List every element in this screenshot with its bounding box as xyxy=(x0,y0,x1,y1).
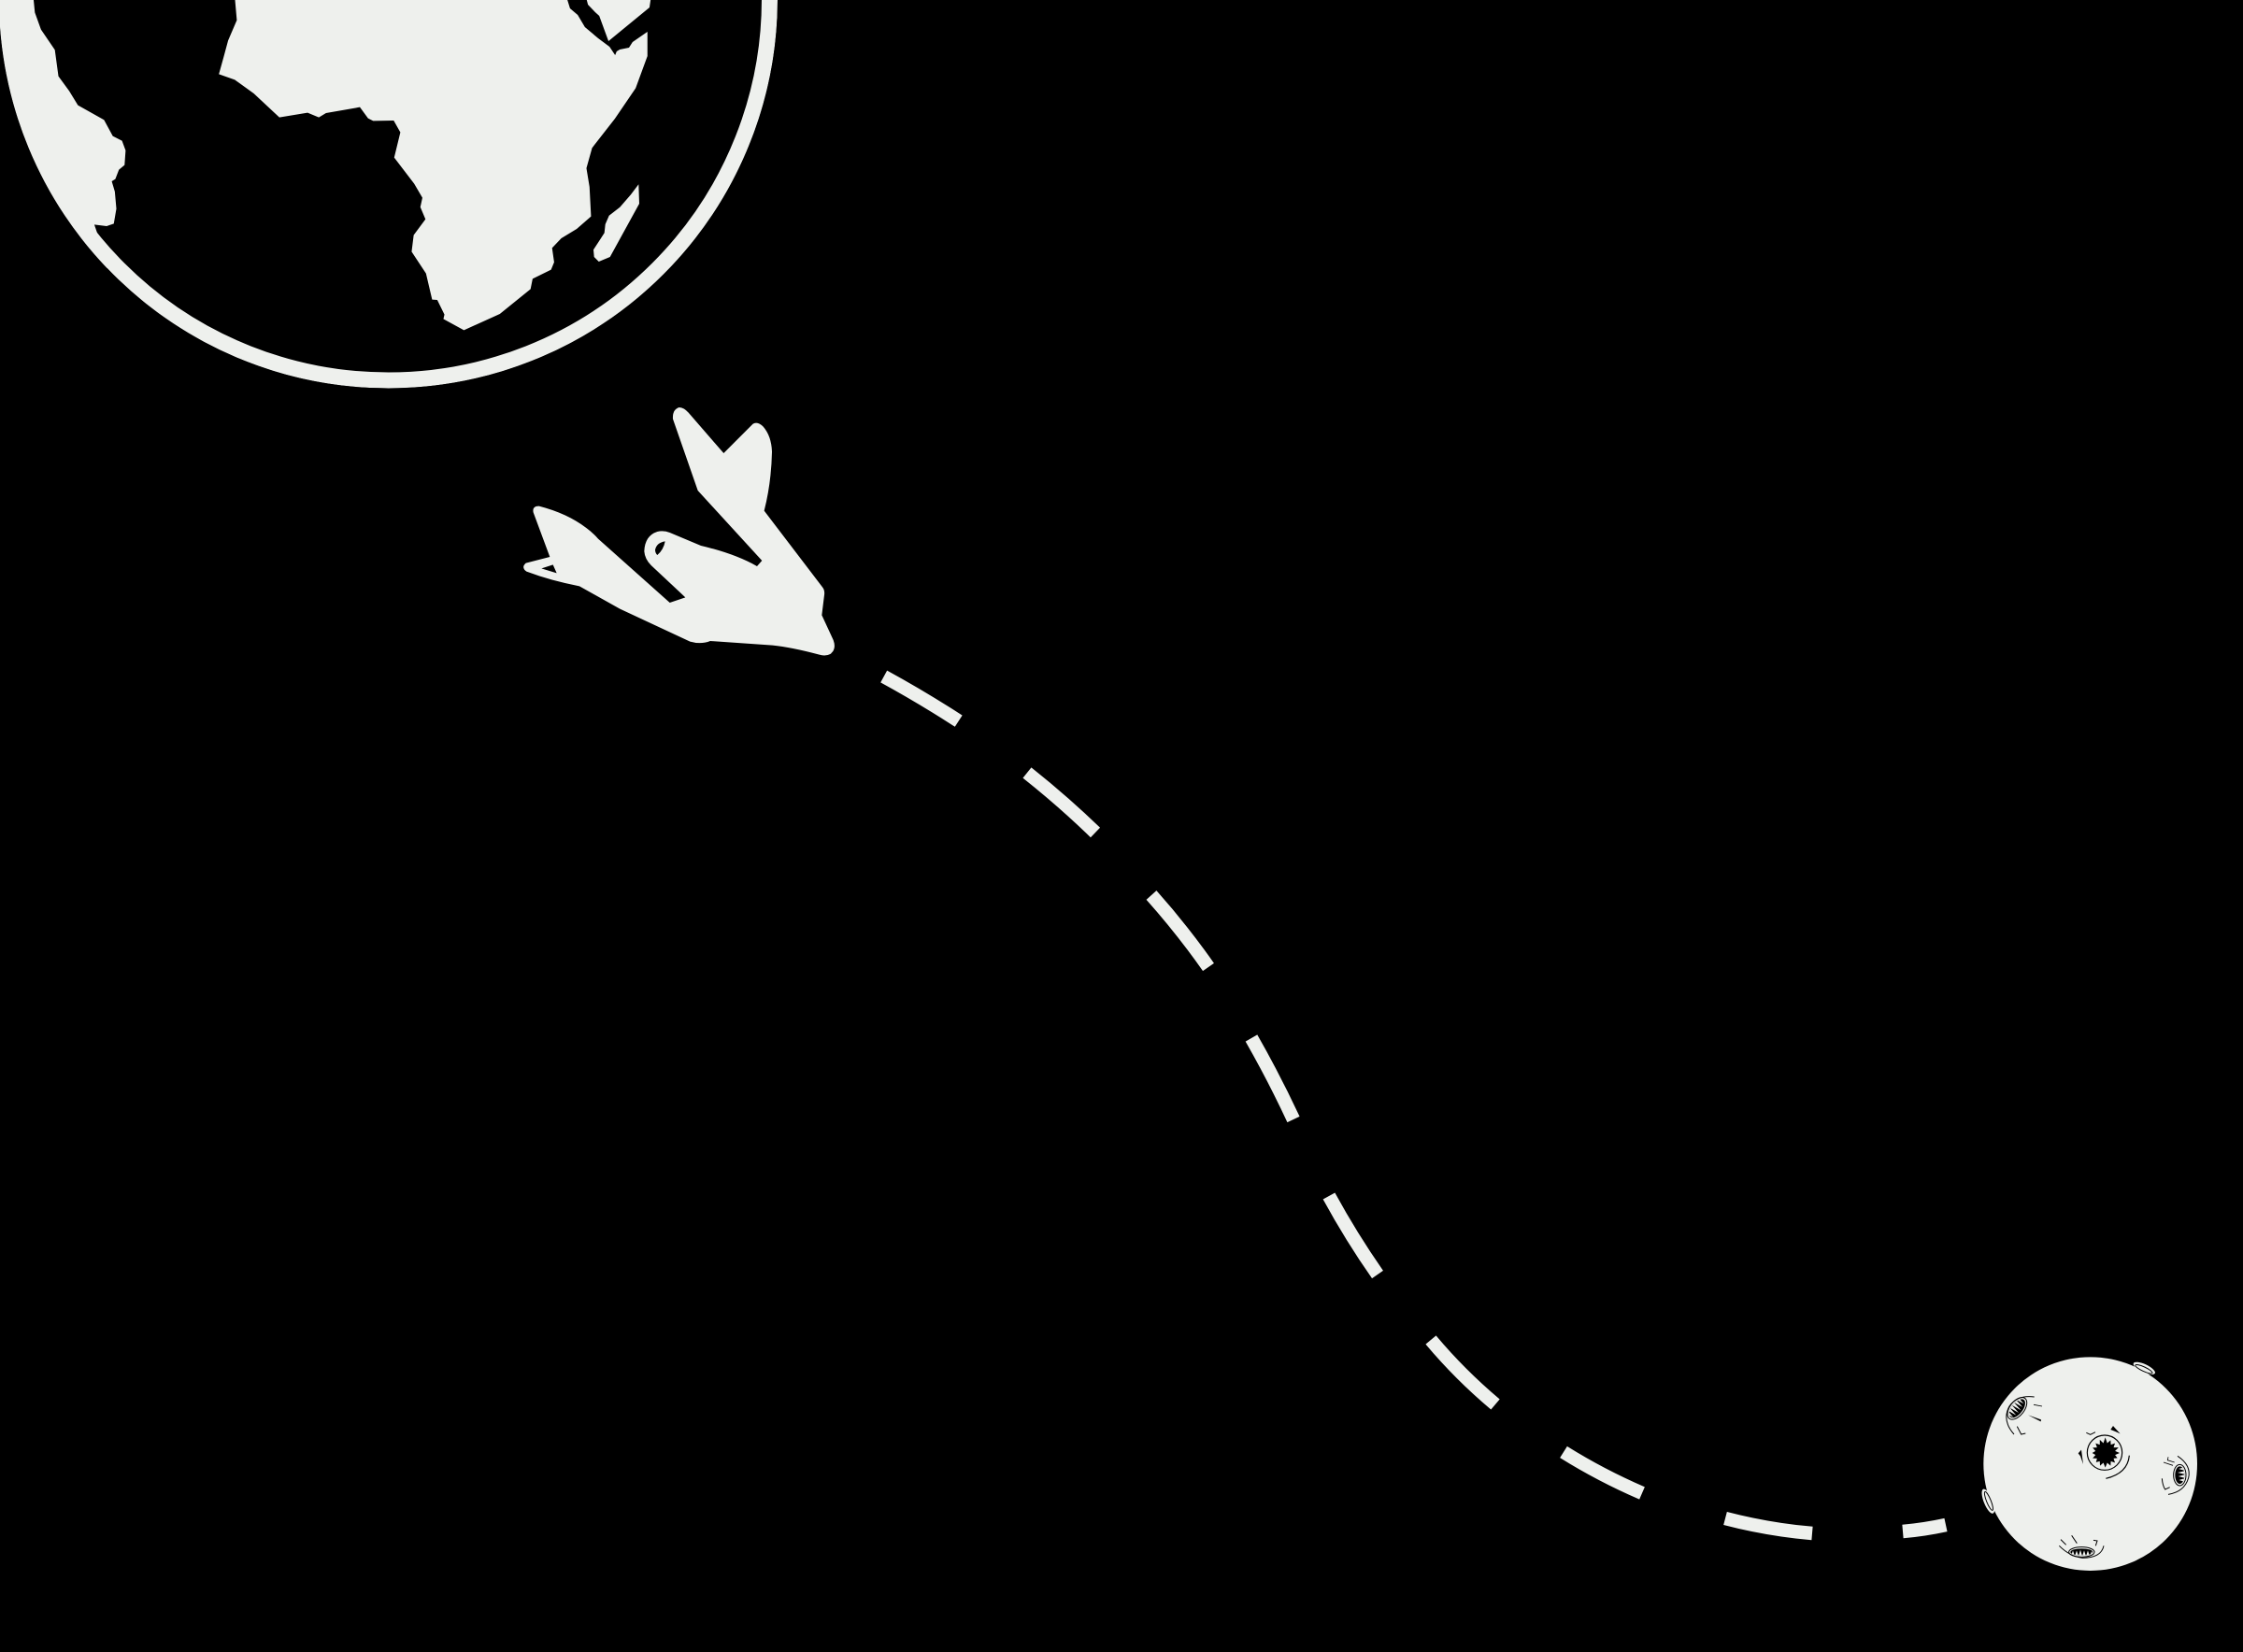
crater: upper left xyxy=(2004,1394,2042,1434)
icon: rocket xyxy=(523,407,835,656)
icon: Earth globe xyxy=(0,0,769,380)
icon: Moon with craters xyxy=(1979,1357,2197,1571)
crater: centre xyxy=(2079,1426,2129,1478)
crater: bottom xyxy=(2059,1535,2104,1558)
arrow: dashed flight path xyxy=(884,676,1946,1533)
crater: right xyxy=(2162,1456,2189,1494)
crater: top rim xyxy=(2132,1360,2157,1377)
crater: left rim xyxy=(1979,1488,1997,1515)
